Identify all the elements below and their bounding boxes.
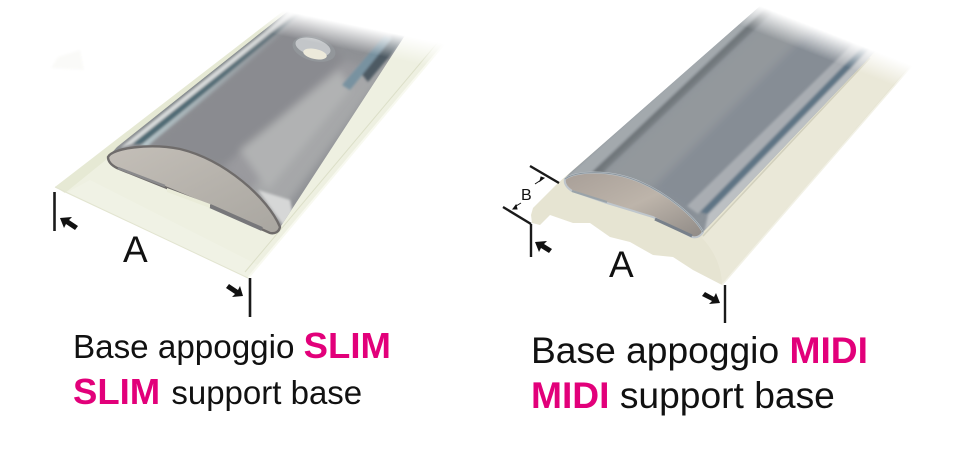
midi left arrow <box>535 241 552 253</box>
midi top fade <box>725 0 956 95</box>
midi B tick top <box>530 166 559 183</box>
midi end cap <box>565 173 703 237</box>
slim mounting hole <box>290 32 338 66</box>
caption italian slim: Base appoggio SLIM <box>73 325 391 366</box>
slim base strip <box>55 0 481 278</box>
slim label A: A <box>123 229 148 270</box>
midi B small arrow bottom <box>513 203 521 209</box>
slim end cap <box>108 146 280 233</box>
caption english slim: SLIM support base <box>73 371 362 412</box>
midi metal profile <box>565 8 872 232</box>
midi label A: A <box>609 244 634 285</box>
caption italian midi: Base appoggio MIDI <box>531 329 868 371</box>
slim right tick <box>249 278 251 317</box>
midi left tick <box>530 224 532 257</box>
caption: MIDI <box>531 329 868 416</box>
midi B small arrow top <box>535 177 544 184</box>
midi B tick bottom <box>503 207 531 224</box>
midi label B: B <box>521 187 532 204</box>
midi right arrow <box>702 292 720 304</box>
product: MIDI support base <box>531 8 908 286</box>
product: SLIM support base <box>54 13 438 278</box>
slim left arrow <box>60 217 78 230</box>
dimension A and B: MIDI <box>503 166 725 323</box>
slim left tick <box>53 192 56 231</box>
slim top fade <box>230 0 500 85</box>
slim right arrow <box>226 284 243 297</box>
caption: SLIM <box>73 325 391 412</box>
slim metal profile <box>113 14 404 226</box>
caption english midi: MIDI support base <box>531 374 835 416</box>
smudge <box>51 50 84 70</box>
dimension A: SLIM <box>54 192 250 317</box>
midi right tick <box>724 285 726 323</box>
midi base strip <box>531 0 956 285</box>
